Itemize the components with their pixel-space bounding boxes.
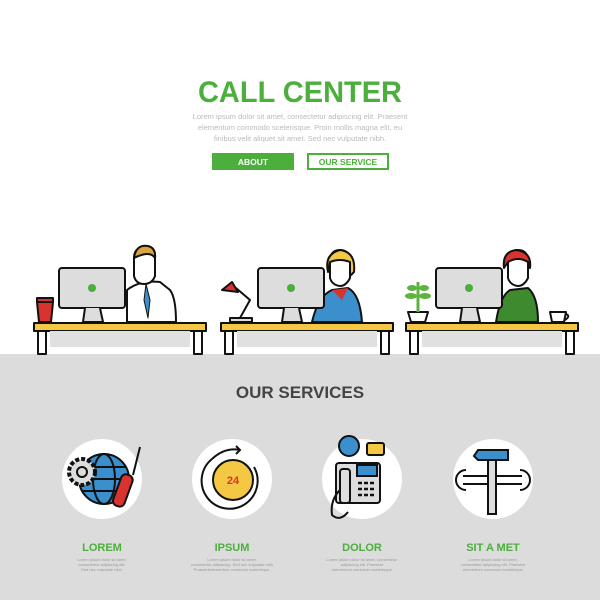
service 2: 24h clock icon: 24 xyxy=(227,475,240,487)
button: about: ABOUT xyxy=(238,157,269,167)
person 1 xyxy=(127,246,176,322)
monitor 2 xyxy=(258,268,324,322)
service descriptions xyxy=(77,557,526,572)
workstation 1 xyxy=(34,246,206,354)
monitor 3 xyxy=(436,268,502,322)
person 3 xyxy=(496,250,538,322)
service descriptions: Lorem ipsum dolor sit amet, xyxy=(207,557,257,562)
service descriptions: Lorem ipsum dolor sit amet, xyxy=(468,557,518,562)
service labels: IPSUM xyxy=(215,542,249,554)
service labels xyxy=(82,542,520,554)
monitor 1 xyxy=(59,268,125,322)
person 2 xyxy=(312,250,362,322)
service labels: SIT A MET xyxy=(466,542,520,554)
desk 3 xyxy=(406,323,578,354)
plant xyxy=(405,282,431,322)
service labels: DOLOR xyxy=(342,542,382,554)
services background panel xyxy=(0,354,600,600)
service 2: 24h clock icon xyxy=(192,439,272,519)
button: our service: OUR SERVICE xyxy=(319,157,378,167)
cup xyxy=(37,298,53,322)
workstation 3 xyxy=(405,250,578,354)
service descriptions: Lorem ipsum dolor sit amet, consectetur xyxy=(326,557,398,562)
intro text xyxy=(193,112,408,143)
intro text: finibus velit aliquet sit amet. Sed nec vulputate nibh. xyxy=(214,134,386,143)
service descriptions: elementum commodo scelerisque xyxy=(332,567,393,572)
intro text: Lorem ipsum dolor sit amet, consectetur adipiscing elit. Praesent xyxy=(193,112,408,121)
service descriptions: consectetur adipiscing elit. xyxy=(79,562,125,567)
button: our service xyxy=(308,154,388,169)
services heading: OUR SERVICES xyxy=(236,383,364,402)
title: CALL CENTER xyxy=(198,76,402,109)
desk 2 xyxy=(221,323,393,354)
service labels: LOREM xyxy=(82,542,122,554)
service 1: globe icon xyxy=(62,439,142,519)
service descriptions: Sed nec vulputate nibh. xyxy=(81,567,123,572)
service descriptions: consectetur adipiscing elit. Praesent xyxy=(461,562,526,567)
service descriptions: Praesentelementum commodo scelerisque. xyxy=(194,567,270,572)
service descriptions: elementum commodo scelerisque xyxy=(463,567,524,572)
coffee cup xyxy=(550,312,568,322)
workstation 2 xyxy=(221,250,393,354)
lamp xyxy=(222,282,252,322)
service descriptions: adipiscing elit. Praesent xyxy=(341,562,384,567)
service 3: phone icon xyxy=(322,436,402,519)
service 4: tools icon xyxy=(453,439,533,519)
service descriptions: consectetur adipiscing. Sed nec vulputate nibh xyxy=(191,562,273,567)
intro text: elementum commodo scelerisque. Proin mollis magna elit, eu xyxy=(198,123,402,132)
service descriptions: Lorem ipsum dolor sit amet, xyxy=(77,557,127,562)
desk 1 xyxy=(34,323,206,354)
button: about xyxy=(212,153,294,170)
